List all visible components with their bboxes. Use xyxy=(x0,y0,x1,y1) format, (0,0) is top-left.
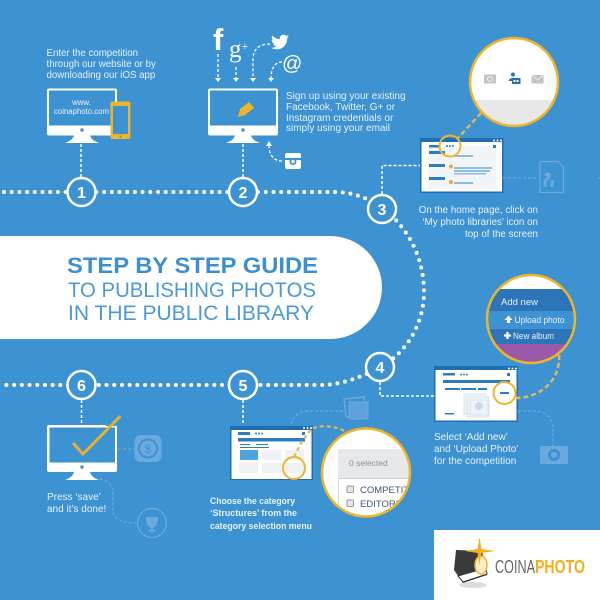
yellow connector step 5 xyxy=(294,426,346,457)
faint connector money xyxy=(118,448,135,450)
logo camera xyxy=(454,550,487,583)
social arrows xyxy=(218,44,282,161)
connector step 6 xyxy=(80,400,82,424)
icon: mail xyxy=(532,75,544,84)
icon: phone xyxy=(110,102,130,139)
icon: faint coin: $ xyxy=(145,442,152,456)
step 5 loupe marker xyxy=(283,457,305,479)
title: step by step guide: STEP BY STEP GUIDE xyxy=(67,253,318,278)
icon: faint coin xyxy=(134,435,162,462)
option: competition: COMPETITION xyxy=(360,485,426,496)
step 5 magnified circle xyxy=(320,427,412,518)
connector step 4 xyxy=(380,382,434,396)
step 4 text: Select ‘Add new’ xyxy=(434,432,508,443)
subtitle line one: TO PUBLISHING PHOTOS xyxy=(68,279,316,302)
icon: faint trophy xyxy=(138,508,166,538)
step 1 monitor: www. xyxy=(71,98,91,107)
step 2 text: simply using your email xyxy=(286,123,390,134)
icon: check mark xyxy=(73,416,120,454)
icon: google plus: + xyxy=(242,39,248,53)
step 1 text: downloading our iOS app xyxy=(46,70,155,81)
step 1 text: Enter the competition xyxy=(46,48,138,59)
faint connector step 5 xyxy=(291,411,345,424)
step 2 text: Sign up using your existing xyxy=(286,91,406,102)
icon: google plus: g xyxy=(229,36,242,63)
step 2 text: Instagram credentials or xyxy=(286,113,394,124)
step 3 magnified circle xyxy=(470,38,560,130)
faint connector trophy xyxy=(100,479,137,523)
icon: faint document xyxy=(540,162,564,192)
step 4 browser xyxy=(434,366,518,422)
step 3 text: top of the screen xyxy=(465,229,538,240)
icon: at sign: @ xyxy=(282,53,302,75)
icon: my photo libraries xyxy=(508,72,520,84)
connector step 2 xyxy=(242,144,244,177)
step 3 loupe marker xyxy=(440,136,460,156)
step 2 badge xyxy=(229,178,257,206)
step 3 text: ‘My photo libraries’ icon on xyxy=(422,217,538,228)
step 4 badge: 4 xyxy=(376,360,385,377)
step 4 loupe marker xyxy=(494,382,516,404)
step 3 browser xyxy=(420,138,504,193)
step 5 text xyxy=(210,496,312,532)
logo panel xyxy=(434,530,600,600)
menu: upload photo: Upload photo xyxy=(514,315,564,326)
step 3 text: On the home page, click on xyxy=(419,205,538,216)
icon: upload arrow xyxy=(504,316,512,323)
step 6 badge xyxy=(68,371,96,399)
option: editorial: EDITORIAL xyxy=(360,499,410,510)
yellow connector step 4 xyxy=(516,355,559,398)
icon: faint camera xyxy=(540,446,568,464)
title banner xyxy=(0,236,382,339)
step 6 monitor xyxy=(47,425,117,480)
step 4 magnified circle xyxy=(487,275,575,364)
dotted timeline path xyxy=(0,192,424,385)
step 2 monitor xyxy=(208,88,278,143)
menu: add new: Add new xyxy=(501,297,538,308)
logo wordmark: photo: PHOTO xyxy=(535,557,585,577)
icon: faint photos xyxy=(344,397,368,419)
step 5 badge xyxy=(229,371,257,399)
step 2 text: Facebook, Twitter, G+ or xyxy=(286,102,396,113)
faint connector step 3 xyxy=(503,177,600,179)
icon: twitter xyxy=(271,35,289,49)
connector step 5 xyxy=(242,400,244,424)
logo wordmark: coina: COINA xyxy=(495,557,535,577)
icon: instagram xyxy=(285,153,301,169)
step 5 text: Choose the category xyxy=(210,496,296,507)
arrowheads xyxy=(215,78,274,146)
logo sparkle xyxy=(465,537,495,565)
subtitle line two: IN THE PUBLIC LIBRARY xyxy=(68,302,314,325)
step 6 text: and it’s done! xyxy=(47,504,106,515)
logo shadow xyxy=(459,582,487,588)
step 3 badge xyxy=(368,195,396,223)
step 1 badge: 1 xyxy=(77,185,86,202)
step 1 monitor xyxy=(47,88,117,143)
step 1 monitor: coinaphoto.com xyxy=(54,107,109,116)
step 4 text: for the competition xyxy=(434,456,516,467)
step 4 text: and ‘Upload Photo’ xyxy=(434,444,519,455)
checkboxes xyxy=(347,486,354,506)
step 3 badge: 3 xyxy=(378,202,387,219)
step 5 badge: 5 xyxy=(239,378,248,395)
yellow connector step 3 xyxy=(458,113,481,138)
menu: new album: New album xyxy=(513,331,554,342)
connector step 3 xyxy=(382,166,420,194)
step 5 text: ‘Structures’ from the xyxy=(210,508,297,519)
step 5 browser xyxy=(230,426,313,480)
step 1 text: through our website or by xyxy=(46,59,156,70)
step 1 badge xyxy=(68,178,96,206)
step 2 badge: 2 xyxy=(239,185,248,202)
label: 0 selected: 0 selected xyxy=(349,458,388,468)
icon: pencil xyxy=(238,102,254,117)
connector step 1 xyxy=(80,144,82,177)
step 6 text: Press ‘save’ xyxy=(47,492,101,503)
icon: camera xyxy=(484,74,496,84)
logo coin xyxy=(475,556,487,574)
step 6 badge: 6 xyxy=(77,378,86,395)
icon: facebook: f xyxy=(213,22,224,57)
icon: plus xyxy=(504,332,511,339)
faint connector step 4 xyxy=(518,411,553,446)
step 5 text: category selection menu xyxy=(210,521,312,532)
step 4 badge xyxy=(366,353,394,381)
